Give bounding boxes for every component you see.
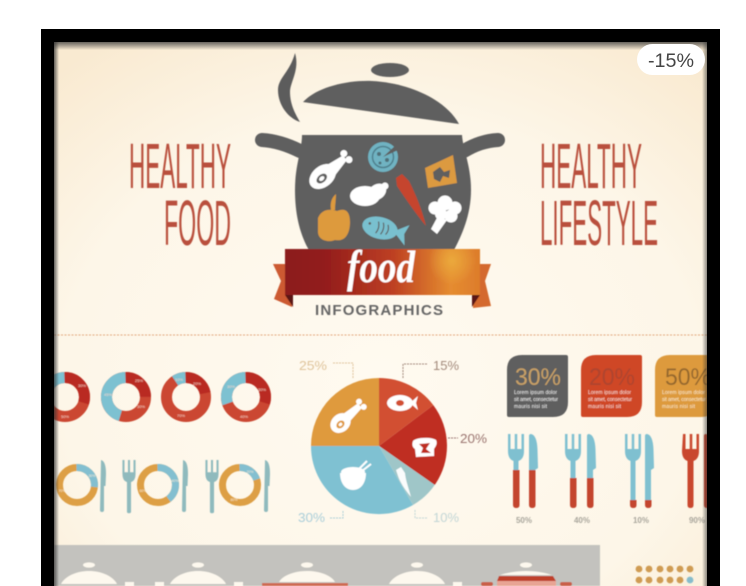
- stat card: 50%: Lorem ipsum dolor: [662, 390, 705, 396]
- cutlery percent labels: [516, 516, 705, 525]
- donut labels: 30%: [227, 384, 235, 389]
- donut row: orange and blue with cutlery: [60, 468, 258, 502]
- pie labels: [298, 358, 487, 525]
- stat card: 30%: mauris nisi sit: [514, 404, 548, 410]
- cutlery 50%: [508, 434, 538, 508]
- stat card: 20%: [581, 355, 642, 417]
- dot grid: [636, 566, 693, 583]
- plate donut labels: 60%: [139, 489, 147, 493]
- stat card: 20%: Lorem ipsum dolor: [588, 390, 631, 396]
- stat card: 20%: mauris nisi sit: [588, 404, 622, 410]
- icon: roast chicken: [350, 180, 389, 206]
- slice: 10%: [379, 446, 435, 505]
- donut labels: 30%: [137, 404, 145, 409]
- plate donut 1: [60, 468, 94, 502]
- pie chart: [311, 378, 447, 514]
- icon: drumstick: [330, 398, 368, 434]
- icon: steam: [278, 53, 300, 122]
- pie labels: 10%: [433, 510, 459, 525]
- plate donut labels: 80%: [230, 498, 238, 502]
- donut 4: [226, 378, 266, 416]
- plate donut labels: 70%: [58, 489, 66, 493]
- pot lid: [303, 63, 459, 124]
- pot 1: [61, 562, 134, 586]
- icon: broccoli: [428, 196, 462, 234]
- donut labels: 50%: [61, 414, 69, 419]
- cutlery 90%: [682, 434, 713, 508]
- cutlery percent labels: 40%: [574, 516, 590, 525]
- icon: carrot: [396, 174, 426, 226]
- text: FOOD: [164, 187, 231, 259]
- pie labels: 30%: [298, 510, 325, 525]
- panel: grey cooking pots: [54, 545, 600, 586]
- stat card: 30%: sit amet, consectetur: [514, 397, 558, 403]
- slice: 25%: [311, 378, 379, 446]
- heading: healthy lifestyle: [541, 142, 658, 246]
- dotted divider: [54, 334, 707, 336]
- donut labels: 30%: [258, 387, 266, 392]
- icon: cheese: [425, 155, 457, 188]
- pot 4: [389, 562, 462, 586]
- stat card: 50%: mauris nisi sit: [662, 404, 696, 410]
- stat card: 20%: 20%: [589, 364, 635, 391]
- ribbon banner: [272, 248, 492, 309]
- donut 2: [106, 378, 146, 416]
- cutlery 10%: [625, 434, 654, 508]
- donut 1: [46, 378, 84, 416]
- donut row: red and blue: [46, 378, 266, 416]
- icon: bowl: [340, 461, 371, 490]
- slice: 20%: [379, 405, 447, 485]
- donut labels: [61, 377, 266, 419]
- cutlery percent labels: 10%: [633, 516, 649, 525]
- subtitle: infographics: INFOGRAPHICS: [315, 302, 445, 319]
- donut labels: 30%: [78, 383, 86, 388]
- pot body with handles: [262, 135, 498, 252]
- donut labels: 25%: [135, 378, 143, 383]
- slice: 30%: [311, 446, 413, 514]
- icon: fish in pot: [360, 213, 410, 245]
- icon: bread: [412, 438, 437, 457]
- donut labels: 70%: [177, 413, 185, 418]
- pie labels: 25%: [299, 358, 327, 373]
- stat card: 30%: 30%: [515, 364, 561, 391]
- donut labels: 20%: [193, 381, 201, 386]
- pie labels: 20%: [460, 431, 487, 446]
- text: HEALTHY: [129, 130, 231, 202]
- icon: bell pepper: [318, 194, 350, 241]
- plate donut 2: [140, 468, 176, 502]
- small knives and forks: [100, 460, 270, 513]
- stat card: 20%: sit amet, consectetur: [588, 397, 632, 403]
- slice: 15%: [379, 378, 433, 446]
- pie labels: 15%: [433, 358, 459, 373]
- pot 2: [155, 562, 243, 586]
- plate donut labels: 30%: [88, 474, 96, 478]
- donut labels: 10%: [175, 377, 183, 382]
- stat card: 30%: [507, 355, 568, 417]
- stat card: 50%: sit amet, consectetur: [662, 397, 706, 403]
- pie leader lines: [330, 363, 458, 518]
- ribbon script: food: food: [347, 241, 416, 292]
- donut labels: 45%: [104, 392, 112, 397]
- pot 3: [262, 562, 348, 586]
- heading: healthy food: [130, 142, 232, 246]
- stat card: 50%: 50%: [665, 364, 711, 391]
- discount badge: -15%: [648, 51, 694, 72]
- pot 5: [481, 562, 572, 586]
- plate donut labels: 40%: [171, 479, 179, 483]
- stat card: 30%: Lorem ipsum dolor: [514, 390, 557, 396]
- donut labels: 40%: [240, 414, 248, 419]
- icon: pizza: [368, 142, 398, 172]
- plate donut labels: [58, 470, 254, 502]
- icon: fish: [387, 395, 418, 411]
- icon: drumstick in pot: [308, 149, 354, 190]
- cutlery percent labels: 50%: [516, 516, 532, 525]
- plate donut 3: [222, 468, 258, 502]
- cutlery percent labels: 90%: [689, 516, 705, 525]
- discount badge: [637, 44, 705, 75]
- stat card: 50%: [655, 355, 716, 417]
- icon: carrot: [396, 467, 411, 497]
- plate donut labels: 20%: [246, 470, 254, 474]
- cutlery 40%: [565, 434, 596, 508]
- donut 3: [166, 378, 206, 416]
